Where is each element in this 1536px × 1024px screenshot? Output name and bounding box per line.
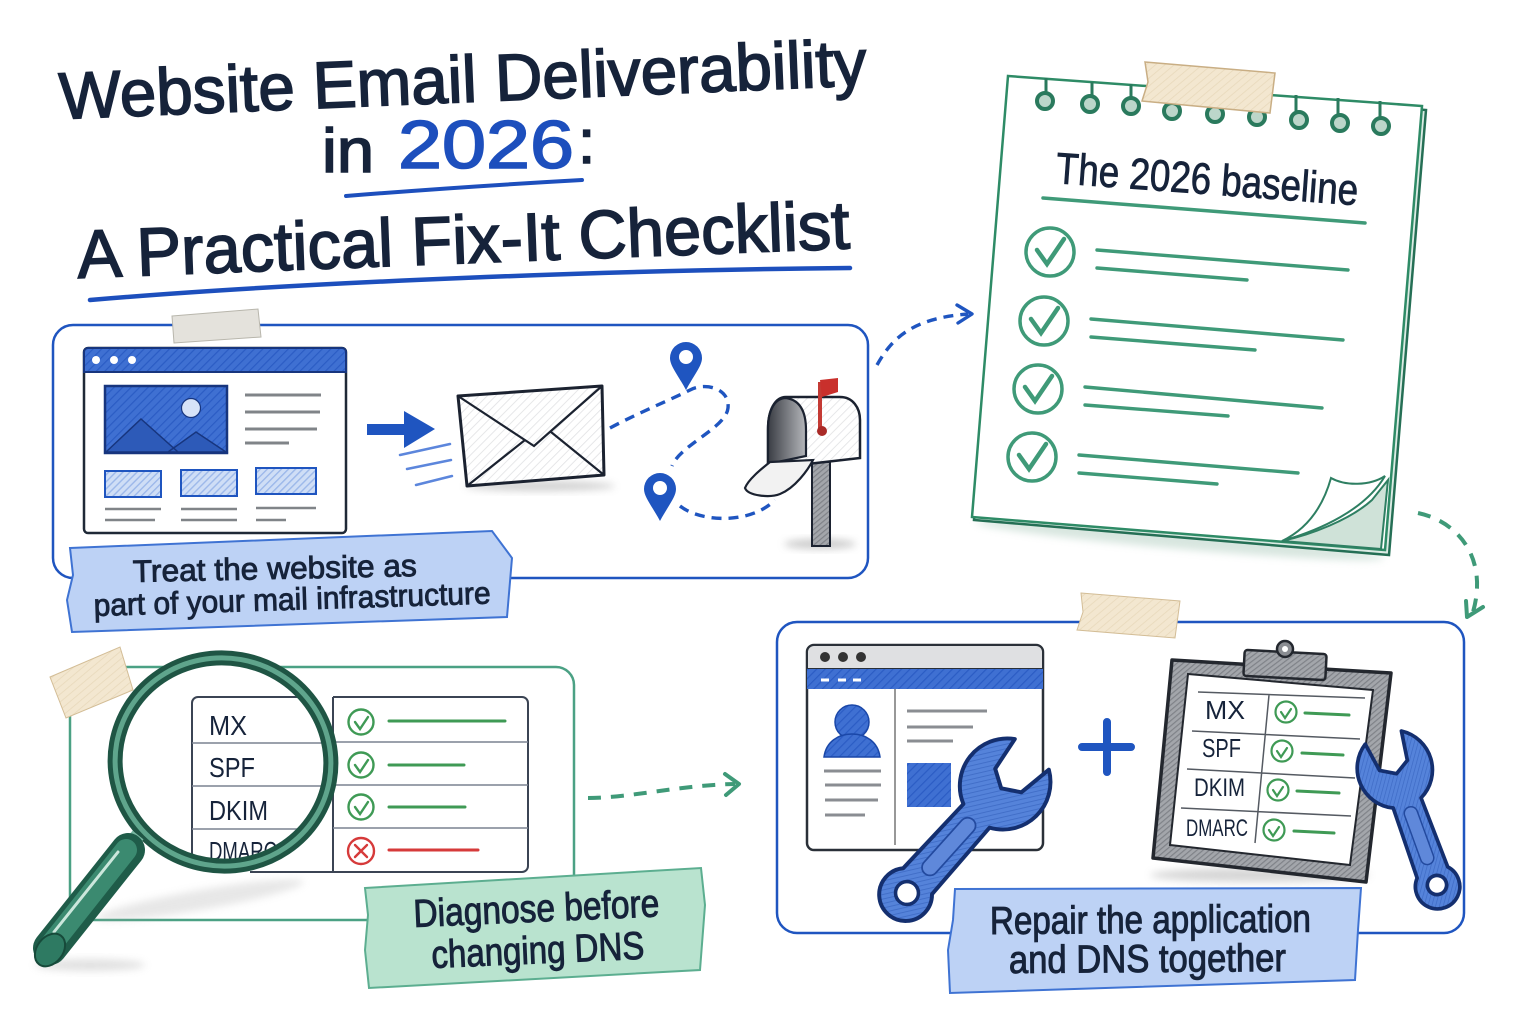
clipboard table: DMARC (1186, 815, 1248, 842)
panel: diagnose (29, 641, 705, 988)
arrow: notebook to repair panel (1418, 513, 1483, 617)
table: dns records: SPF (209, 752, 255, 783)
icon: mailbox (745, 378, 860, 549)
table: dns records: MX (209, 710, 247, 741)
icon: envelope (458, 386, 615, 491)
icon: magnifying glass (29, 641, 347, 972)
label: repair the application: and DNS together (1009, 937, 1286, 982)
spiral rings (1037, 78, 1389, 134)
icon: location pin top (670, 342, 702, 390)
tape (50, 647, 133, 718)
icon: wrench small (1348, 725, 1480, 920)
label: repair the application: Repair the application (990, 898, 1311, 943)
panel: repair (777, 593, 1480, 993)
checklist (1008, 228, 1348, 484)
tape (172, 309, 261, 343)
label: repair the application (948, 888, 1361, 993)
title: in (322, 117, 374, 186)
title: A Practical Fix-It Checklist (76, 187, 851, 293)
icon: website window (84, 348, 346, 533)
icon: location pin bottom (644, 473, 676, 521)
title: Website Email Deliverability (57, 25, 868, 133)
table: dns records: DKIM (209, 795, 268, 826)
panel: website as mail infrastructure (53, 309, 868, 632)
icon: clipboard (1150, 641, 1391, 882)
dashed route (610, 387, 775, 518)
clipboard table: DKIM (1194, 774, 1245, 802)
icon: website window (807, 645, 1043, 850)
heading: The 2026 baseline (1054, 144, 1360, 215)
clipboard table (1181, 692, 1365, 843)
page curl (1282, 476, 1388, 549)
tape (1142, 62, 1275, 113)
magnifier lens backing (99, 641, 347, 883)
clipboard table: SPF (1202, 733, 1241, 763)
label: treat the website: Treat the website as (132, 548, 417, 589)
table: dns records (192, 697, 528, 880)
panel: notebook the 2026 baseline (972, 62, 1426, 567)
arrow: diagnose to repair (588, 774, 739, 798)
arrow: website to envelope (367, 411, 452, 485)
title: : (578, 108, 595, 177)
clipboard table: MX (1205, 695, 1245, 725)
label: treat the website (67, 531, 512, 632)
table: dns records: DMARC (209, 836, 277, 866)
icon: wrench large (855, 725, 1065, 944)
title: 2026 (398, 107, 574, 183)
title (57, 25, 868, 300)
label: treat the website: part of your mail infrastructure (93, 576, 491, 623)
tape (1077, 593, 1180, 638)
label: diagnose before changing dns: Diagnose before (413, 882, 660, 936)
label: diagnose before changing dns (365, 868, 705, 988)
plus sign (1082, 722, 1131, 772)
arrow: panel to notebook (877, 305, 972, 365)
label: diagnose before changing dns: changing DNS (431, 925, 645, 977)
